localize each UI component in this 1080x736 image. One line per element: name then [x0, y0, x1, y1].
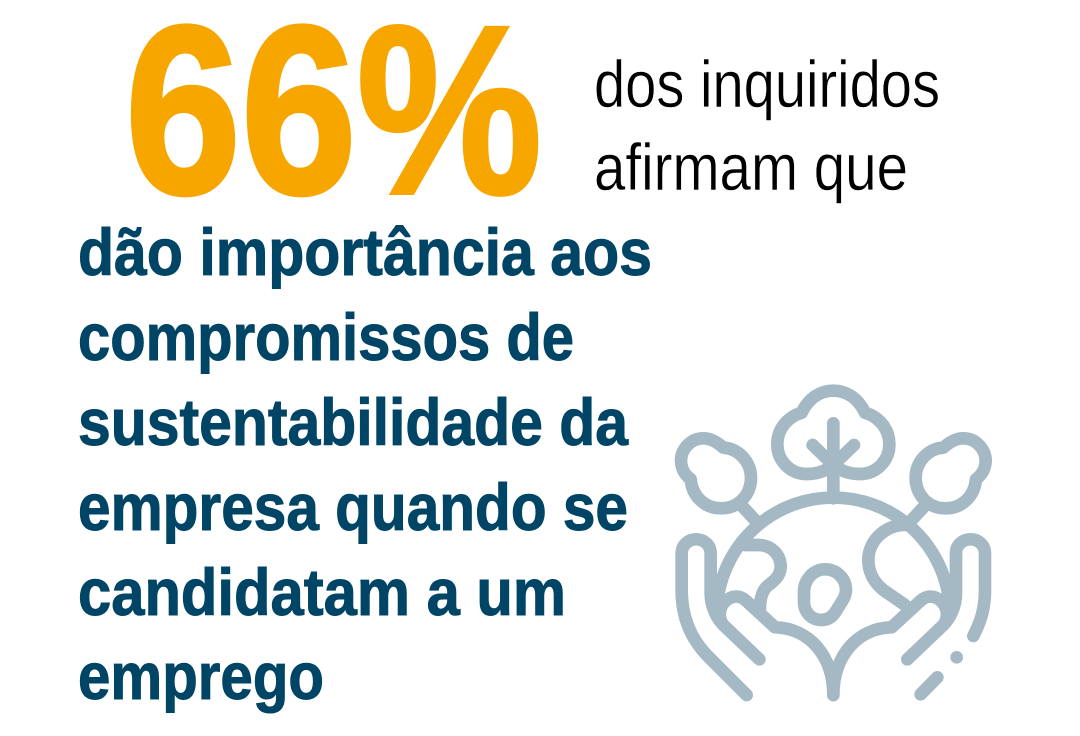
icon: hands holding a globe with trees: [681, 391, 986, 695]
icon: dot: [950, 651, 963, 664]
main statement: [78, 215, 652, 713]
icon: left tree: [681, 438, 755, 520]
intro text: afirmam que: [594, 130, 908, 204]
intro text: [594, 47, 940, 204]
icon: globe continents: [745, 525, 908, 620]
icon: dash: [921, 677, 937, 694]
main statement: candidatam a um: [78, 555, 566, 629]
icon: centre tree: [777, 391, 889, 498]
main statement: compromissos de: [78, 300, 574, 374]
icon: left hand: [682, 539, 833, 695]
main statement: empresa quando se: [78, 470, 628, 544]
intro text: dos inquiridos: [594, 47, 940, 121]
icon: right hand: [833, 539, 985, 695]
icon: globe arc: [718, 498, 949, 597]
icon: right tree: [912, 438, 986, 520]
main statement: sustentabilidade da: [78, 385, 629, 459]
main statement: dão importância aos: [78, 215, 652, 289]
main statement: emprego: [78, 639, 324, 713]
